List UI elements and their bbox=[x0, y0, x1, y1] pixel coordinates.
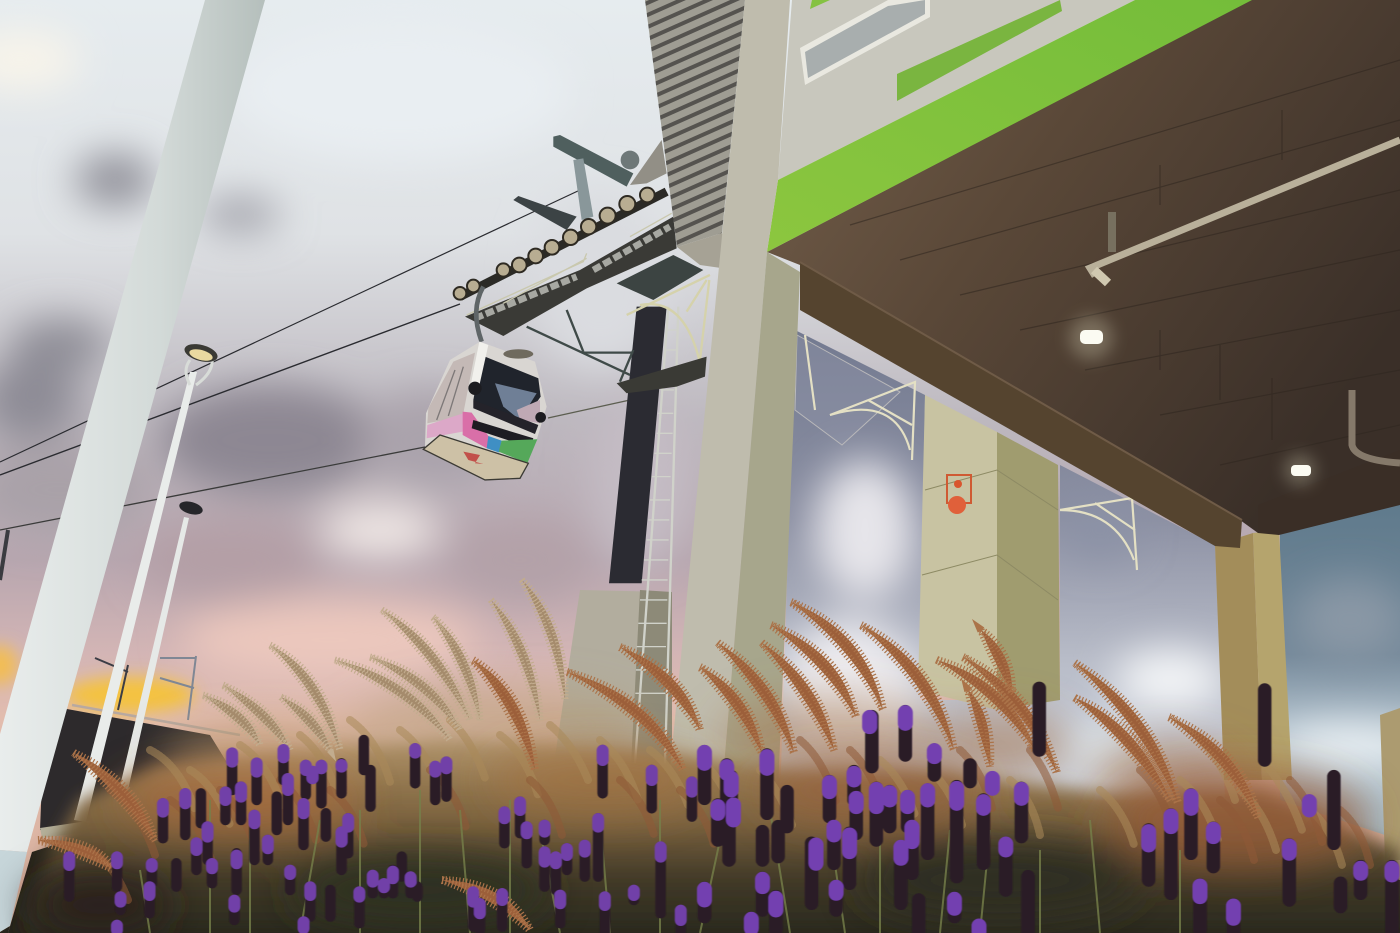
metal truss arches bbox=[795, 335, 1137, 570]
pale grass plumes bbox=[203, 580, 565, 750]
distant wall and fixtures bbox=[40, 656, 250, 838]
column logo bbox=[947, 475, 971, 514]
window bbox=[800, 0, 930, 85]
red grass plumes bbox=[38, 602, 1258, 930]
cables bbox=[0, 190, 630, 530]
walkway bbox=[465, 213, 703, 336]
green band bbox=[767, 0, 1252, 252]
upper arm bbox=[513, 135, 667, 230]
support struts bbox=[527, 310, 633, 382]
street lamp near bbox=[74, 341, 219, 822]
sky between columns bbox=[780, 330, 1225, 800]
sunset glow bbox=[0, 645, 195, 713]
service ladder bbox=[635, 307, 678, 763]
grass mass bbox=[8, 687, 1400, 933]
green stems bbox=[140, 790, 1180, 933]
street lamp far bbox=[120, 499, 204, 790]
colour blocks bbox=[487, 436, 502, 453]
clouds left bbox=[0, 20, 690, 680]
tower column bbox=[609, 307, 667, 583]
building louvers bbox=[645, 0, 745, 270]
tower and gondola bbox=[423, 135, 710, 763]
gondola cabin bbox=[423, 342, 547, 480]
grass texture tufts bbox=[90, 720, 1370, 900]
gondola hanger bbox=[476, 287, 483, 342]
ceiling pipe bbox=[1090, 140, 1400, 463]
main white pole bbox=[0, 0, 265, 933]
clouds right bbox=[780, 460, 1400, 775]
far ceiling edge bbox=[1258, 450, 1400, 535]
mid concrete column bbox=[918, 395, 1060, 710]
lavender left bbox=[69, 740, 692, 933]
floor bbox=[423, 435, 528, 480]
floor logo bbox=[463, 452, 483, 464]
plume haze over the sky bbox=[160, 687, 1250, 810]
pink band bbox=[427, 413, 463, 438]
dark window bbox=[473, 357, 541, 427]
concrete beam bbox=[800, 262, 1242, 548]
far edge post bbox=[1380, 708, 1400, 860]
lavender right bbox=[704, 688, 1392, 933]
tower concrete base bbox=[550, 590, 672, 790]
ceiling light right bbox=[1284, 454, 1316, 486]
white brace arches bbox=[627, 275, 710, 360]
main concrete column bbox=[668, 0, 800, 790]
sheave rollers bbox=[454, 188, 667, 300]
right concrete column bbox=[1215, 530, 1292, 780]
white door post bbox=[470, 342, 488, 390]
small left lamp bbox=[0, 530, 8, 580]
building wall bbox=[778, 0, 1135, 180]
left windows bbox=[427, 353, 475, 423]
roof unit bbox=[503, 349, 533, 359]
ceiling bbox=[767, 0, 1400, 535]
ceiling light left bbox=[1069, 316, 1113, 360]
